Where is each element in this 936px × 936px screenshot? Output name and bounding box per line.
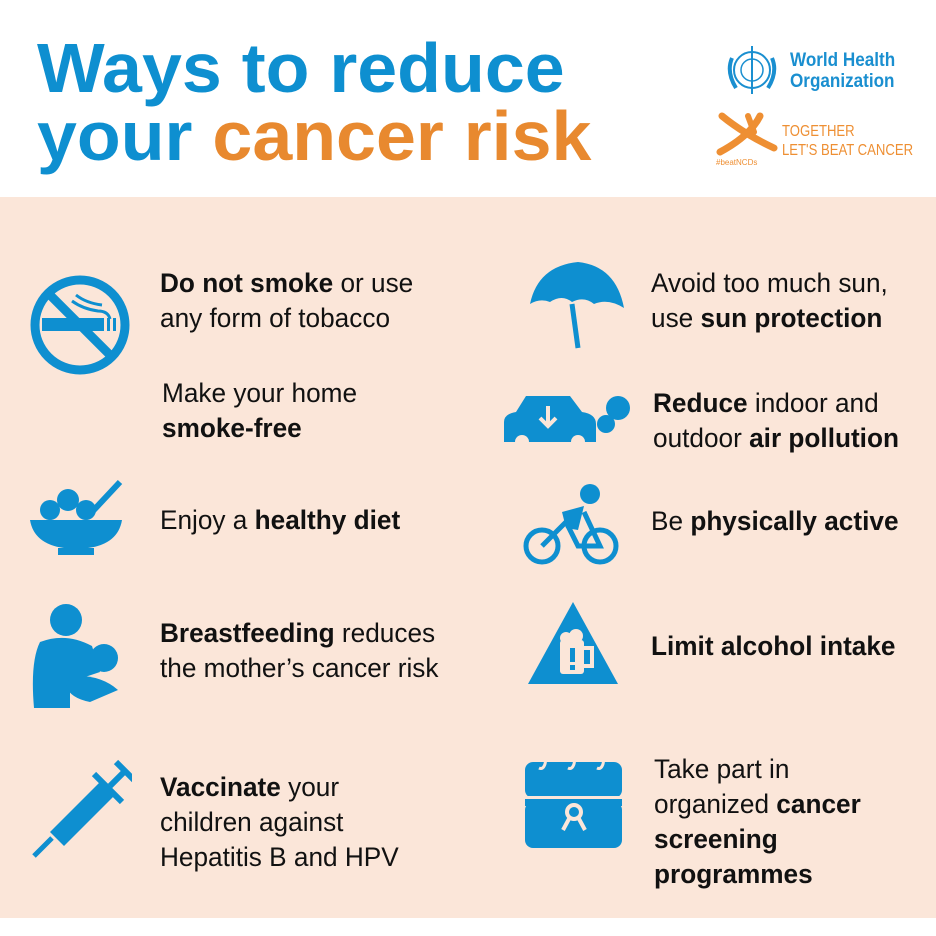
text: vaccinate: children against xyxy=(160,807,343,837)
text: alcohol: Limit alcohol intake xyxy=(651,631,895,661)
text: sun xyxy=(651,268,888,333)
text: sun: use sun protection xyxy=(651,303,882,333)
text: vaccinate: Vaccinate your xyxy=(160,772,339,802)
logo: WHO xyxy=(728,46,895,94)
title xyxy=(37,29,592,175)
logo: WHO: World Health xyxy=(790,50,895,71)
icon: umbrella xyxy=(530,262,624,348)
text: smoke-free home: smoke-free xyxy=(162,413,302,443)
icon: car pollution xyxy=(504,396,630,442)
text: screening: programmes xyxy=(654,859,813,889)
icon: calendar ribbon xyxy=(525,762,622,848)
text: sun: Avoid too much sun, xyxy=(651,268,888,298)
icon: salad bowl xyxy=(30,480,122,555)
text: do not smoke xyxy=(160,268,413,333)
logo: together let's beat cancer xyxy=(716,112,913,167)
title: Ways to reduce xyxy=(37,29,565,107)
text: do not smoke: Do not smoke or use xyxy=(160,268,413,298)
text: do not smoke: any form of tobacco xyxy=(160,303,390,333)
text: breastfeeding: Breastfeeding reduces xyxy=(160,618,435,648)
logo: together let's beat cancer: TOGETHER xyxy=(782,123,855,140)
text: vaccinate xyxy=(160,772,399,872)
text: vaccinate: Hepatitis B and HPV xyxy=(160,842,399,872)
icon: no smoking xyxy=(30,276,130,374)
logo: together let's beat cancer: LET'S BEAT CANCER xyxy=(782,142,913,159)
title: your cancer risk xyxy=(37,97,591,175)
text: smoke-free home xyxy=(162,378,357,443)
logo: WHO: Organization xyxy=(790,71,895,92)
text: breastfeeding xyxy=(160,618,439,683)
text: screening xyxy=(654,754,861,889)
logo: together let's beat cancer: #beatNCDs xyxy=(716,158,757,167)
text: air pollution xyxy=(653,388,899,453)
text: air pollution: outdoor air pollution xyxy=(653,423,899,453)
icon: breastfeeding xyxy=(32,604,118,708)
icon: alcohol warning xyxy=(528,602,618,684)
text: screening: screening xyxy=(654,824,778,854)
text: physically active: Be physically active xyxy=(651,506,899,536)
icon: cyclist xyxy=(524,484,618,564)
text: screening: organized cancer xyxy=(654,789,861,819)
panel: background xyxy=(0,197,936,918)
text: air pollution: Reduce indoor and xyxy=(653,388,879,418)
text: breastfeeding: the mother’s cancer risk xyxy=(160,653,439,683)
text: screening: Take part in xyxy=(654,754,789,784)
text: healthy diet: Enjoy a healthy diet xyxy=(160,505,400,535)
icon: syringe xyxy=(32,760,132,858)
text: smoke-free home: Make your home xyxy=(162,378,357,408)
